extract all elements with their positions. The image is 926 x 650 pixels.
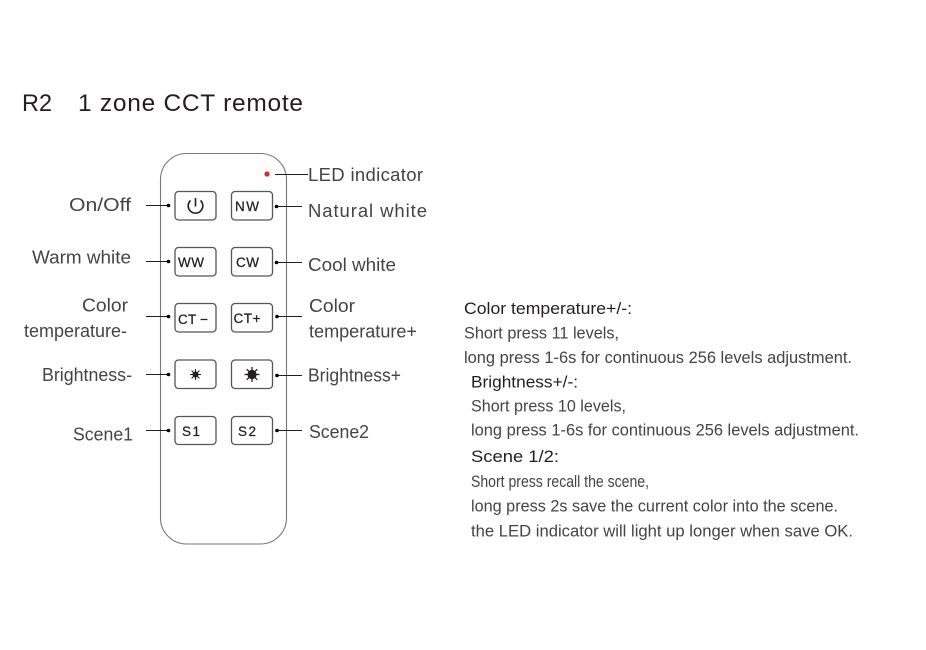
- description text: the LED indicator will light up longer when save OK.: [471, 522, 853, 540]
- button: S2: [232, 416, 272, 444]
- button: S2: S2: [238, 424, 256, 439]
- left leader lines: [146, 204, 170, 432]
- remote control: [160, 154, 286, 544]
- description text: Short press 11 levels,: [464, 324, 619, 342]
- button: CT+: [232, 304, 272, 332]
- description text: [464, 299, 859, 540]
- right labels: Cool white: [308, 254, 396, 275]
- left labels: Warm white: [32, 246, 131, 268]
- button: NW: NW: [235, 199, 259, 214]
- right labels: [308, 164, 427, 442]
- button: power: [175, 192, 216, 220]
- button: CW: CW: [236, 255, 259, 270]
- left labels: On/Off: [69, 194, 132, 215]
- description text: long press 2s save the current color into the scene.: [471, 496, 838, 516]
- right leader lines: [275, 174, 308, 432]
- button: WW: WW: [178, 255, 204, 270]
- remote body: [160, 154, 286, 544]
- right labels: Natural white: [308, 200, 427, 221]
- description text: Short press 10 levels,: [471, 396, 626, 416]
- left labels: Brightness-: [42, 364, 132, 385]
- right labels: LED indicator: [308, 164, 423, 185]
- left labels: temperature-: [24, 320, 127, 341]
- button: brightness minus: [175, 360, 216, 388]
- button: WW: [175, 248, 216, 276]
- right labels: Scene2: [309, 421, 369, 442]
- right labels: temperature+: [309, 320, 417, 342]
- title: R2: [22, 90, 52, 117]
- button: S1: [175, 416, 216, 444]
- right labels: Brightness+: [308, 364, 401, 386]
- button: CT-: CT −: [178, 312, 208, 327]
- right labels: Color: [309, 295, 355, 316]
- button: S1: S1: [182, 424, 200, 439]
- LED indicator dot: [264, 171, 270, 177]
- left labels: Scene1: [73, 424, 133, 444]
- description text: long press 1-6s for continuous 256 levels adjustment.: [471, 420, 859, 440]
- button: brightness plus: [232, 360, 272, 388]
- button: CW: [232, 248, 272, 276]
- description text: long press 1-6s for continuous 256 levels adjustment.: [464, 348, 852, 367]
- description text: Color temperature+/-:: [464, 299, 632, 318]
- title: 1 zone CCT remote: [78, 90, 303, 117]
- description text: Brightness+/-:: [471, 372, 578, 392]
- description text: Short press recall the scene,: [471, 472, 649, 491]
- button: CT-: [175, 304, 216, 332]
- description text: Scene 1/2:: [471, 447, 559, 466]
- button: NW: [232, 192, 272, 220]
- button: CT+: CT+: [234, 311, 261, 326]
- left labels: [24, 194, 133, 444]
- left labels: Color: [82, 294, 128, 316]
